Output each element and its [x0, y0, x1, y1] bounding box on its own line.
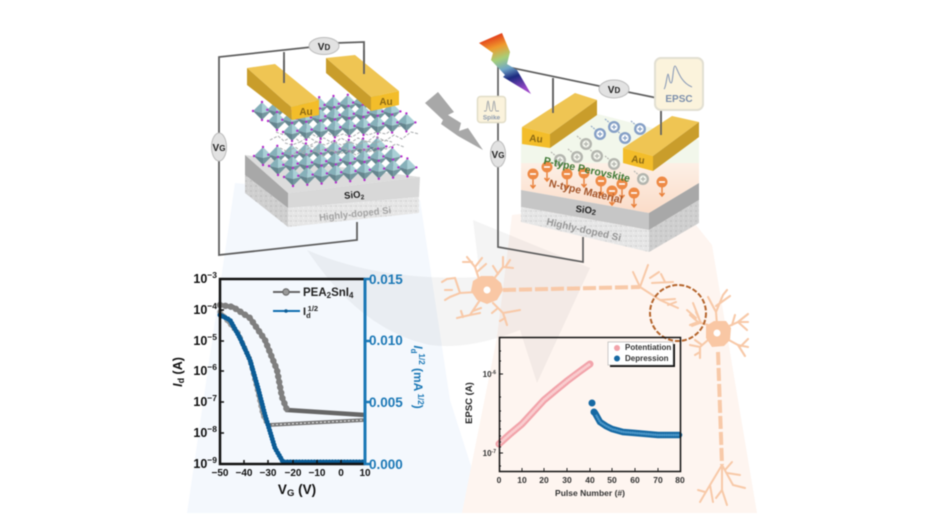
x axis tick labels	[212, 468, 371, 479]
VD meter	[599, 80, 629, 98]
x tick labels: 70	[653, 475, 663, 485]
upper perovskite octahedra layer	[252, 91, 417, 142]
VG meter	[212, 133, 226, 161]
VG meter: VG	[213, 143, 225, 154]
legend: 1/2	[308, 304, 318, 313]
gold electrode right	[623, 105, 699, 171]
x tick labels: 30	[562, 475, 572, 485]
left axis tick labels: −3	[207, 270, 217, 280]
presynaptic neuron	[442, 257, 700, 326]
lower perovskite octahedra layer	[253, 136, 418, 187]
gold electrode 2	[326, 50, 399, 111]
label: P-type Perovskite: P-type Perovskite	[542, 155, 631, 185]
left axis tick labels: 10	[193, 395, 207, 409]
axis title: Id 1/2: I	[411, 345, 425, 349]
axis title: Id 1/2: d	[409, 349, 418, 354]
left axis tick labels: 10	[193, 272, 207, 286]
right axis tick labels: 0.010	[369, 333, 403, 348]
right axis tick labels: 0.000	[369, 457, 403, 472]
legend: Potentiation	[625, 343, 671, 352]
x tick labels	[497, 475, 685, 485]
legend: Depression	[625, 354, 669, 363]
legend: 4	[349, 291, 354, 300]
icon: spike input box	[478, 96, 506, 122]
circuit wires	[498, 65, 661, 262]
background cone: left device to transfer chart	[187, 183, 486, 513]
hole carriers	[551, 119, 648, 184]
VD meter: VD	[318, 42, 330, 53]
axis title: Id 1/2: 1/2	[416, 391, 425, 405]
substrate and material stack	[521, 112, 699, 252]
axis title: Id 1/2: )	[411, 405, 425, 409]
grey transfer curves	[220, 305, 365, 425]
x tick labels: 60	[630, 475, 640, 485]
depression series	[588, 400, 679, 435]
y tick labels: 10	[483, 449, 492, 458]
y tick labels: 10	[483, 370, 492, 379]
x tick labels: 50	[607, 475, 617, 485]
right axis tick labels	[369, 272, 403, 472]
circuit wires	[219, 42, 364, 255]
neurons	[442, 257, 748, 505]
x axis tick labels: −40	[236, 468, 253, 479]
VD meter	[309, 38, 339, 54]
neuron body 1	[471, 276, 503, 304]
right axis tick labels: 0.015	[369, 272, 403, 287]
axis title: Id: I	[171, 383, 185, 387]
y axis title: EPSC (A)	[464, 382, 475, 424]
left axis tick labels: −9	[207, 455, 217, 465]
axis title: Id: (A)	[171, 357, 185, 378]
label: SiO2: 2	[591, 208, 596, 217]
x tick labels: 20	[539, 475, 549, 485]
legend: 2	[327, 291, 332, 300]
x axis tick labels: −50	[212, 468, 229, 479]
x tick labels: 40	[585, 475, 595, 485]
VG meter	[490, 141, 506, 167]
x tick labels: 10	[517, 475, 527, 485]
axis title: Id 1/2: 1/2	[417, 354, 426, 365]
label: SiO2: 2	[360, 194, 365, 201]
gold electrode 2: Au	[379, 97, 393, 108]
transfer characteristic chart	[171, 270, 426, 499]
axis title: Id: d	[176, 378, 186, 383]
y tick labels: -7	[492, 449, 496, 455]
x axis tick labels: −30	[260, 468, 277, 479]
icon: rainbow light bolt	[479, 33, 531, 94]
left device: perovskite transistor	[212, 38, 420, 255]
x axis tick labels: 0	[338, 468, 344, 479]
axis title: VG: V	[278, 482, 287, 497]
left axis tick labels	[193, 270, 217, 471]
left axis tick labels: −8	[207, 424, 217, 434]
right device: heterojunction synaptic transistor	[478, 33, 703, 262]
x axis tick labels: −20	[285, 468, 302, 479]
x tick labels: 0	[497, 475, 502, 485]
x tick labels: 80	[675, 475, 685, 485]
legend: I	[303, 306, 306, 318]
label: Highly-doped Si: Highly-doped Si	[319, 205, 392, 224]
label: SiO2: SiO	[344, 189, 361, 202]
left axis tick labels: 10	[193, 364, 207, 378]
synapse dashed circle	[650, 285, 706, 341]
background cone: right device to synaptic chart	[462, 195, 757, 513]
label: SiO2: SiO	[575, 204, 592, 217]
VG meter: VG	[492, 150, 504, 161]
electron carriers	[528, 162, 668, 207]
left axis tick labels: −4	[207, 301, 217, 311]
substrate stack	[245, 155, 420, 227]
icon: EPSC output box: EPSC	[665, 94, 693, 105]
gold electrode 1: Au	[299, 107, 313, 118]
icon: EPSC output box	[655, 58, 703, 110]
left axis tick labels: −7	[207, 393, 217, 403]
neuron body 2	[706, 321, 731, 347]
left axis tick labels: −5	[207, 332, 217, 342]
gold electrode 1	[247, 60, 319, 120]
postsynaptic neuron	[690, 290, 748, 505]
legend: d	[306, 311, 311, 320]
axis title: VG: G	[287, 488, 294, 499]
plot frame	[220, 278, 370, 465]
gold electrode right: Au	[631, 154, 645, 167]
label: N-type Material: N-type Material	[548, 178, 624, 206]
legend: PEA	[303, 287, 327, 299]
plot frame	[499, 338, 680, 472]
blue sqrt curve	[220, 315, 365, 462]
left axis tick labels: 10	[193, 334, 207, 348]
left axis tick labels: 10	[193, 303, 207, 317]
x axis tick labels: −10	[309, 468, 326, 479]
arrow: grey lightning bolt between devices	[425, 92, 483, 150]
label: Highly-doped Si: Highly-doped Si	[545, 217, 622, 244]
x axis tick labels: 10	[359, 468, 371, 479]
potentiation series	[499, 364, 590, 444]
axis title: Id 1/2: (mA	[411, 365, 425, 392]
EPSC potentiation and depression chart	[464, 338, 685, 498]
left axis tick labels: 10	[193, 426, 207, 440]
icon: spike input box: Spike	[483, 114, 501, 122]
x axis title: Pulse Number (#)	[555, 488, 625, 498]
legend: SnI	[331, 287, 349, 299]
y tick labels: -6	[492, 370, 496, 376]
left axis tick labels: 10	[193, 457, 207, 471]
background curved grey arrow	[307, 220, 590, 383]
left axis tick labels: −6	[207, 362, 217, 372]
right axis tick labels: 0.005	[369, 395, 403, 410]
y tick labels	[483, 370, 496, 458]
legend	[273, 287, 354, 320]
gold electrode left	[522, 78, 597, 148]
gold electrode left: Au	[529, 133, 543, 146]
organic spacer molecules	[270, 121, 419, 156]
axis title: VG: (V)	[294, 482, 316, 497]
legend	[608, 342, 675, 367]
VD meter: VD	[608, 85, 620, 96]
